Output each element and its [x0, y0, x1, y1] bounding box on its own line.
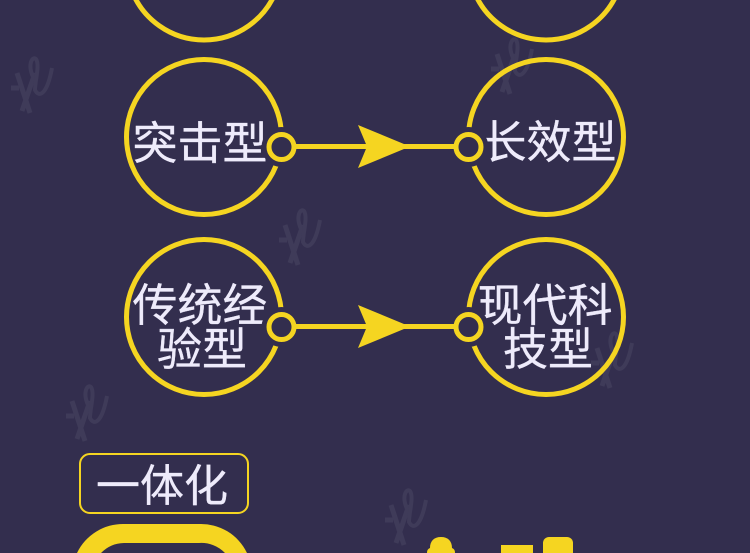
label box: 一体化: 一体化 [96, 462, 228, 511]
label: 传统经验型 [132, 280, 268, 375]
circle: 传统经验型 [126, 240, 282, 394]
icon: person, cropped [427, 537, 455, 553]
label: 现代科技型: 现代科 [477, 280, 613, 331]
circle: 现代科技型 [468, 240, 624, 394]
circle: 长效型 [468, 60, 624, 214]
icon: bars, cropped [501, 537, 573, 553]
circle: 突击型 [126, 60, 282, 214]
arrow: 突击型 to 长效型 [262, 125, 488, 168]
row: 突击型 to 长效型 [126, 60, 624, 214]
icon: rounded frame, cropped [77, 524, 247, 553]
label: 传统经验型: 传统经 [132, 280, 268, 331]
partial circle: top left [131, 0, 277, 40]
partial circle: top right [473, 0, 619, 40]
row: 传统经验型 to 现代科技型 [126, 240, 624, 394]
label: 现代科技型 [477, 280, 613, 375]
label box: 一体化 [80, 454, 248, 513]
watermarks [11, 39, 632, 545]
label: 现代科技型: 技型 [503, 324, 593, 375]
label: 突击型: 突击型 [132, 118, 268, 169]
arrow: 传统经验型 to 现代科技型 [262, 305, 488, 348]
label: 传统经验型: 验型 [157, 324, 247, 375]
label: 长效型: 长效型 [481, 117, 617, 168]
